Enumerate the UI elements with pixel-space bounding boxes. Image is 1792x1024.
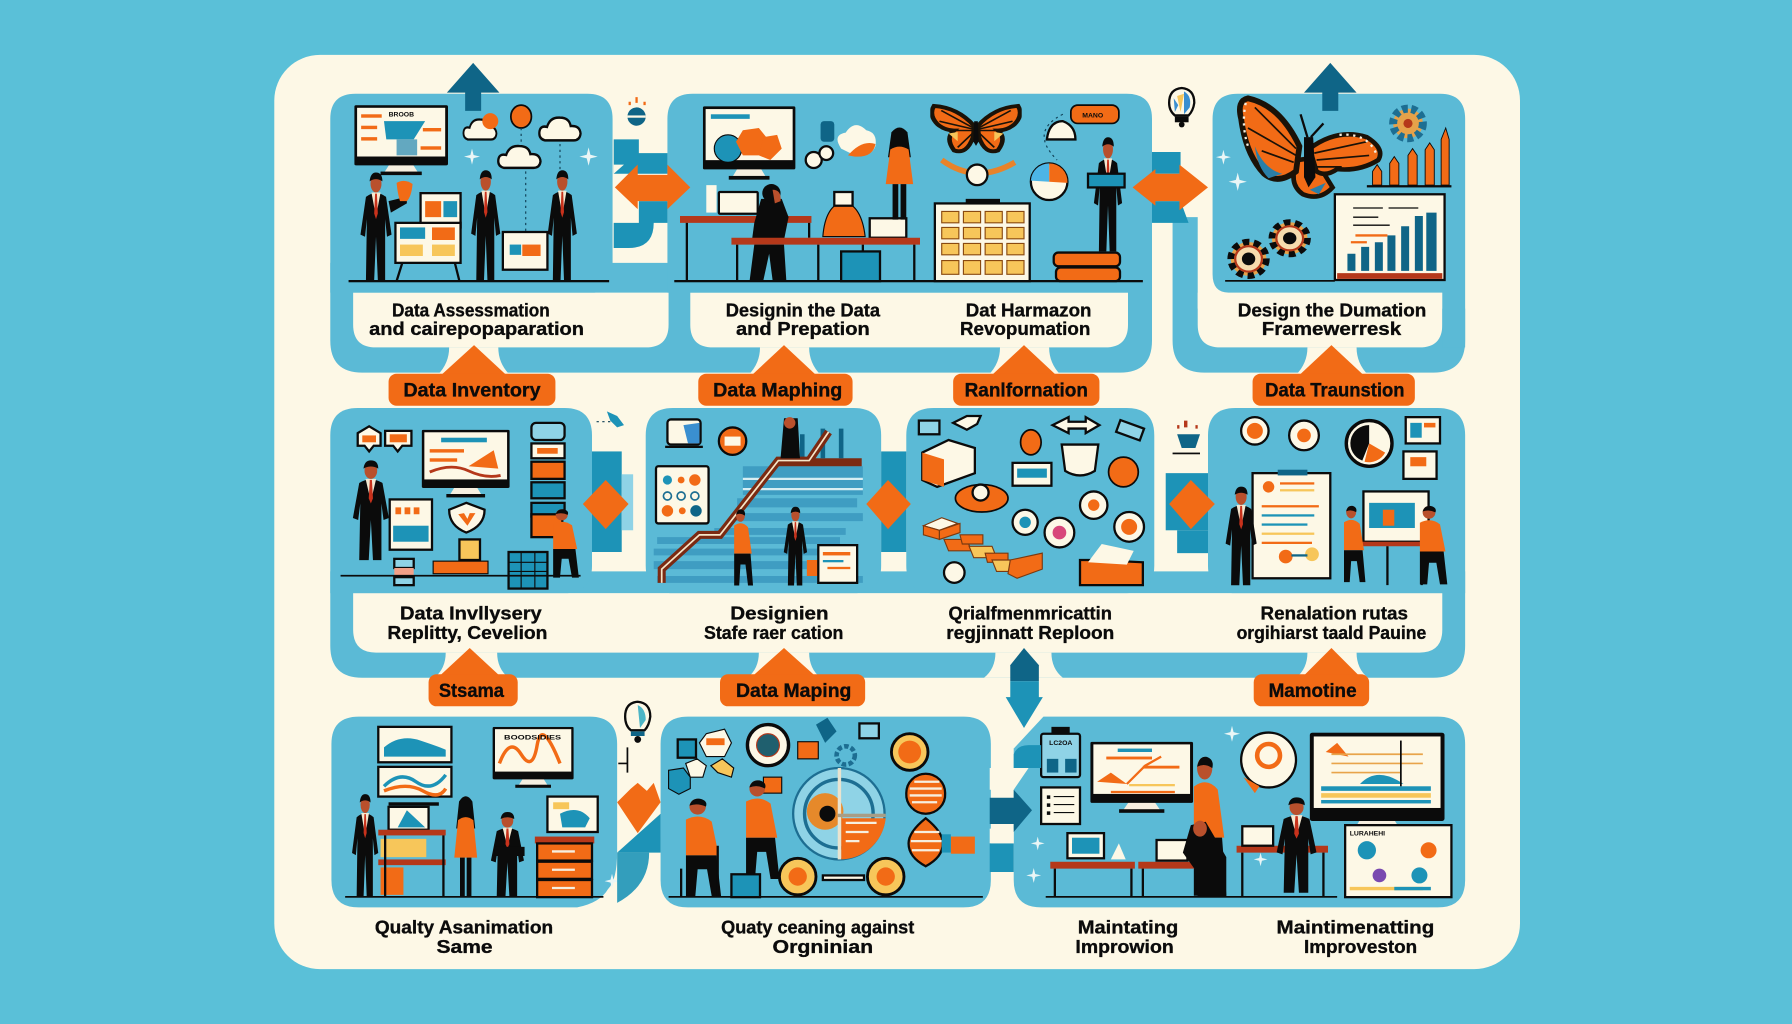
icon: butterfly <box>932 106 1020 151</box>
text block: row 3 captions: Same <box>437 936 493 957</box>
icon: map boards <box>378 727 451 806</box>
icon: laptop <box>665 419 703 448</box>
text block: row 1 captions <box>369 300 1426 339</box>
icon: gear g <box>837 746 855 765</box>
icon: orange steps <box>923 518 1042 578</box>
arrow: heart connector <box>617 747 661 903</box>
label: stsama <box>429 648 518 706</box>
figure: man <box>352 794 378 896</box>
text block: row 3 captions: Improwion <box>1075 936 1174 957</box>
icon: stacked tags <box>531 423 565 537</box>
arrow: vertical double arrow <box>1006 648 1043 728</box>
icon: orange pin and laptop <box>1013 430 1051 486</box>
icon: orange dial <box>719 427 746 455</box>
chart: radial pie <box>793 768 886 859</box>
label: transformation: Ranlfornation <box>965 380 1088 402</box>
arrow: double arrow row 1 right <box>1133 152 1208 223</box>
figure: woman standing <box>886 127 913 220</box>
icon: chart monitor <box>1090 742 1193 813</box>
panel: maintaining illustration <box>1014 717 1465 907</box>
icon: monitor: BOODSIDIES <box>504 734 562 741</box>
text block: row 1 captions: and Prepation <box>736 318 870 339</box>
figure: seated man <box>491 812 525 896</box>
text block: row 1 captions: Design the Dumation <box>1238 300 1426 321</box>
icon: map picture <box>547 797 598 832</box>
icon: striped circles <box>906 774 975 866</box>
label: data maping <box>720 648 865 706</box>
icon: envelope <box>1080 544 1143 585</box>
icon: sparkles <box>1216 150 1247 191</box>
text block: row 1 captions: Designin the Data <box>726 300 881 321</box>
panel: stair illustration <box>646 408 881 593</box>
panel: quality cleaning illustration <box>661 717 991 907</box>
panel: data design illustration <box>667 94 1152 293</box>
icon: calendar grid <box>935 199 1030 281</box>
icon: drawers <box>535 837 594 897</box>
icon: badges <box>1241 417 1392 466</box>
icon: dots board <box>656 466 709 523</box>
icon: up arrow left <box>447 63 499 111</box>
arrow: double arrow row 1 left <box>614 139 690 248</box>
icon: small stack and equipment <box>394 513 547 589</box>
text block: row 2 captions: Replitty, Cevelion <box>387 622 547 643</box>
icon: lightbulb row 3 <box>625 702 650 743</box>
icon: blue bird <box>597 411 624 427</box>
panel: remediation illustration <box>1208 408 1465 593</box>
icon: small head row 2 <box>1173 421 1200 454</box>
icon: round badges <box>944 457 1144 583</box>
text block: row 1 captions: Data Assessmation <box>392 300 550 321</box>
icon: dish <box>955 485 1008 512</box>
icon: shield <box>449 503 485 533</box>
figure: two workers <box>681 780 779 897</box>
icon: clipboard tag <box>1041 727 1080 777</box>
panel: quality assessment illustration <box>331 717 619 907</box>
icon: cloud with shapes <box>806 121 876 168</box>
figure: seated people <box>1183 797 1316 897</box>
label: data transition: Data Traunstion <box>1265 380 1405 402</box>
icon: report <box>807 545 857 583</box>
row 1 connector bands <box>330 217 1465 375</box>
icon: diagram board: LURAHEHI <box>1350 830 1385 837</box>
text block: row 2 captions: Qrialfmenmricattin <box>949 602 1112 623</box>
panel: transformation illustration <box>906 408 1154 593</box>
text block: row 2 captions: Renalation rutas <box>1261 602 1408 623</box>
figure: seated worker <box>553 509 579 578</box>
icon: house tags <box>358 426 411 451</box>
icon: large monitor <box>1310 733 1445 835</box>
text block: row 3 captions: Quaty ceaning against <box>721 917 914 938</box>
icon: large butterfly <box>1240 98 1380 197</box>
text block: row 3 captions: Qualty Asanimation <box>375 917 553 938</box>
icon: monitor <box>493 727 574 788</box>
text block: row 3 captions <box>375 917 1434 957</box>
icon: small tags <box>763 718 879 794</box>
icon: tag and arc <box>942 105 1119 185</box>
label: transformation <box>953 345 1099 406</box>
bar chart: framed report <box>1335 194 1445 280</box>
icon: screen and two workers <box>1344 491 1447 585</box>
figure: presenting man <box>353 460 389 560</box>
main card <box>274 55 1520 969</box>
icon: crate <box>922 440 975 487</box>
icon: hexagons <box>669 729 734 794</box>
figure: standing orange presenter <box>1194 757 1226 896</box>
label: data inventory <box>389 345 555 406</box>
text block: row 1 captions: Revopumation <box>960 318 1090 339</box>
row 2 connector band <box>330 571 1465 678</box>
label: data inventory: Data Inventory <box>403 380 541 402</box>
label: mamotine: Mamotine <box>1269 680 1357 702</box>
panel: data inventory illustration <box>330 408 592 593</box>
text block: row 1 captions: Dat Harmazon <box>966 300 1091 321</box>
icon: coins <box>779 734 928 895</box>
icon: cup <box>1062 445 1098 475</box>
icon: hexagon monitor <box>703 106 795 180</box>
label: stsama: Stsama <box>439 680 504 702</box>
icon: presentation monitor: BROOB <box>389 112 414 119</box>
icon: top arrows <box>919 416 1144 440</box>
label: data maping: Data Maping <box>736 680 851 702</box>
figure: people on stairs <box>734 417 807 586</box>
icon: sparkles <box>1026 726 1267 883</box>
text block: row 3 captions: Orgninian <box>773 936 873 957</box>
icon: clouds <box>463 105 581 234</box>
bar chart: rising bars <box>1367 128 1451 187</box>
icon: monitor with line chart <box>422 430 510 497</box>
icon: sparkles <box>464 147 598 166</box>
icon: board <box>395 193 461 281</box>
arrow: diamond connector 1 <box>583 451 633 552</box>
desks and laptops <box>1050 826 1328 897</box>
icon: check list <box>1041 787 1080 824</box>
icon: desk and shelves <box>378 807 446 897</box>
text block: row 2 captions <box>387 602 1426 643</box>
icon: target dial <box>747 725 789 766</box>
text block: row 2 captions: Data Invllysery <box>400 602 543 623</box>
figure: presenter <box>1226 487 1257 585</box>
stripes and stair <box>654 429 863 583</box>
desks and seated worker <box>680 184 920 281</box>
icon: clipboard report <box>1253 470 1330 578</box>
icon: blue gear <box>1393 109 1423 138</box>
icon: tag and arc: MANO <box>1082 113 1104 120</box>
text block: row 2 captions: orgihiarst taald Pauine <box>1237 622 1426 643</box>
icon: round badge <box>1241 733 1296 793</box>
text block: row 2 captions: Designien <box>730 602 829 623</box>
label: data mapping: Data Maphing <box>713 380 842 402</box>
arrow: diamond connector 3 <box>1166 473 1215 553</box>
text block: row 1 captions: Framewerresk <box>1262 318 1402 339</box>
icon: chart card <box>503 232 547 270</box>
text block: row 1 captions: and cairepopaparation <box>369 318 584 339</box>
icon: sparkle <box>605 874 619 889</box>
figure: three men <box>360 170 577 280</box>
label: data mapping <box>698 345 853 406</box>
figure: woman <box>454 796 477 896</box>
icon: diagram board <box>1345 825 1451 897</box>
figure: man on books <box>1054 137 1125 281</box>
panel: data assessment illustration <box>330 94 613 293</box>
icon: clipboard tag: LC2OA <box>1049 740 1072 747</box>
icon: lightbulb top <box>1169 88 1194 127</box>
text block: row 3 captions: Maintimenatting <box>1277 917 1434 938</box>
panel: duration framework illustration <box>1213 94 1465 347</box>
icon: small head <box>627 97 646 126</box>
icon: up arrow right <box>1304 63 1357 111</box>
text block: row 3 captions: Improveston <box>1304 936 1417 957</box>
arrow: diamond connector 2 <box>866 451 911 552</box>
icon: presentation monitor <box>354 105 448 175</box>
icon: small board <box>390 499 432 550</box>
label: data transition <box>1253 345 1415 406</box>
text block: row 3 captions: Maintating <box>1078 917 1178 938</box>
label: mamotine <box>1254 648 1369 706</box>
icon: pie chart <box>1031 163 1067 200</box>
icon: side documents <box>1403 417 1440 479</box>
text block: row 2 captions: regjinnatt Reploon <box>946 622 1114 643</box>
icon: gears <box>1231 222 1308 276</box>
arrow: right arrow row 3 <box>990 745 1041 872</box>
text block: row 2 captions: Stafe raer cation <box>704 622 843 643</box>
